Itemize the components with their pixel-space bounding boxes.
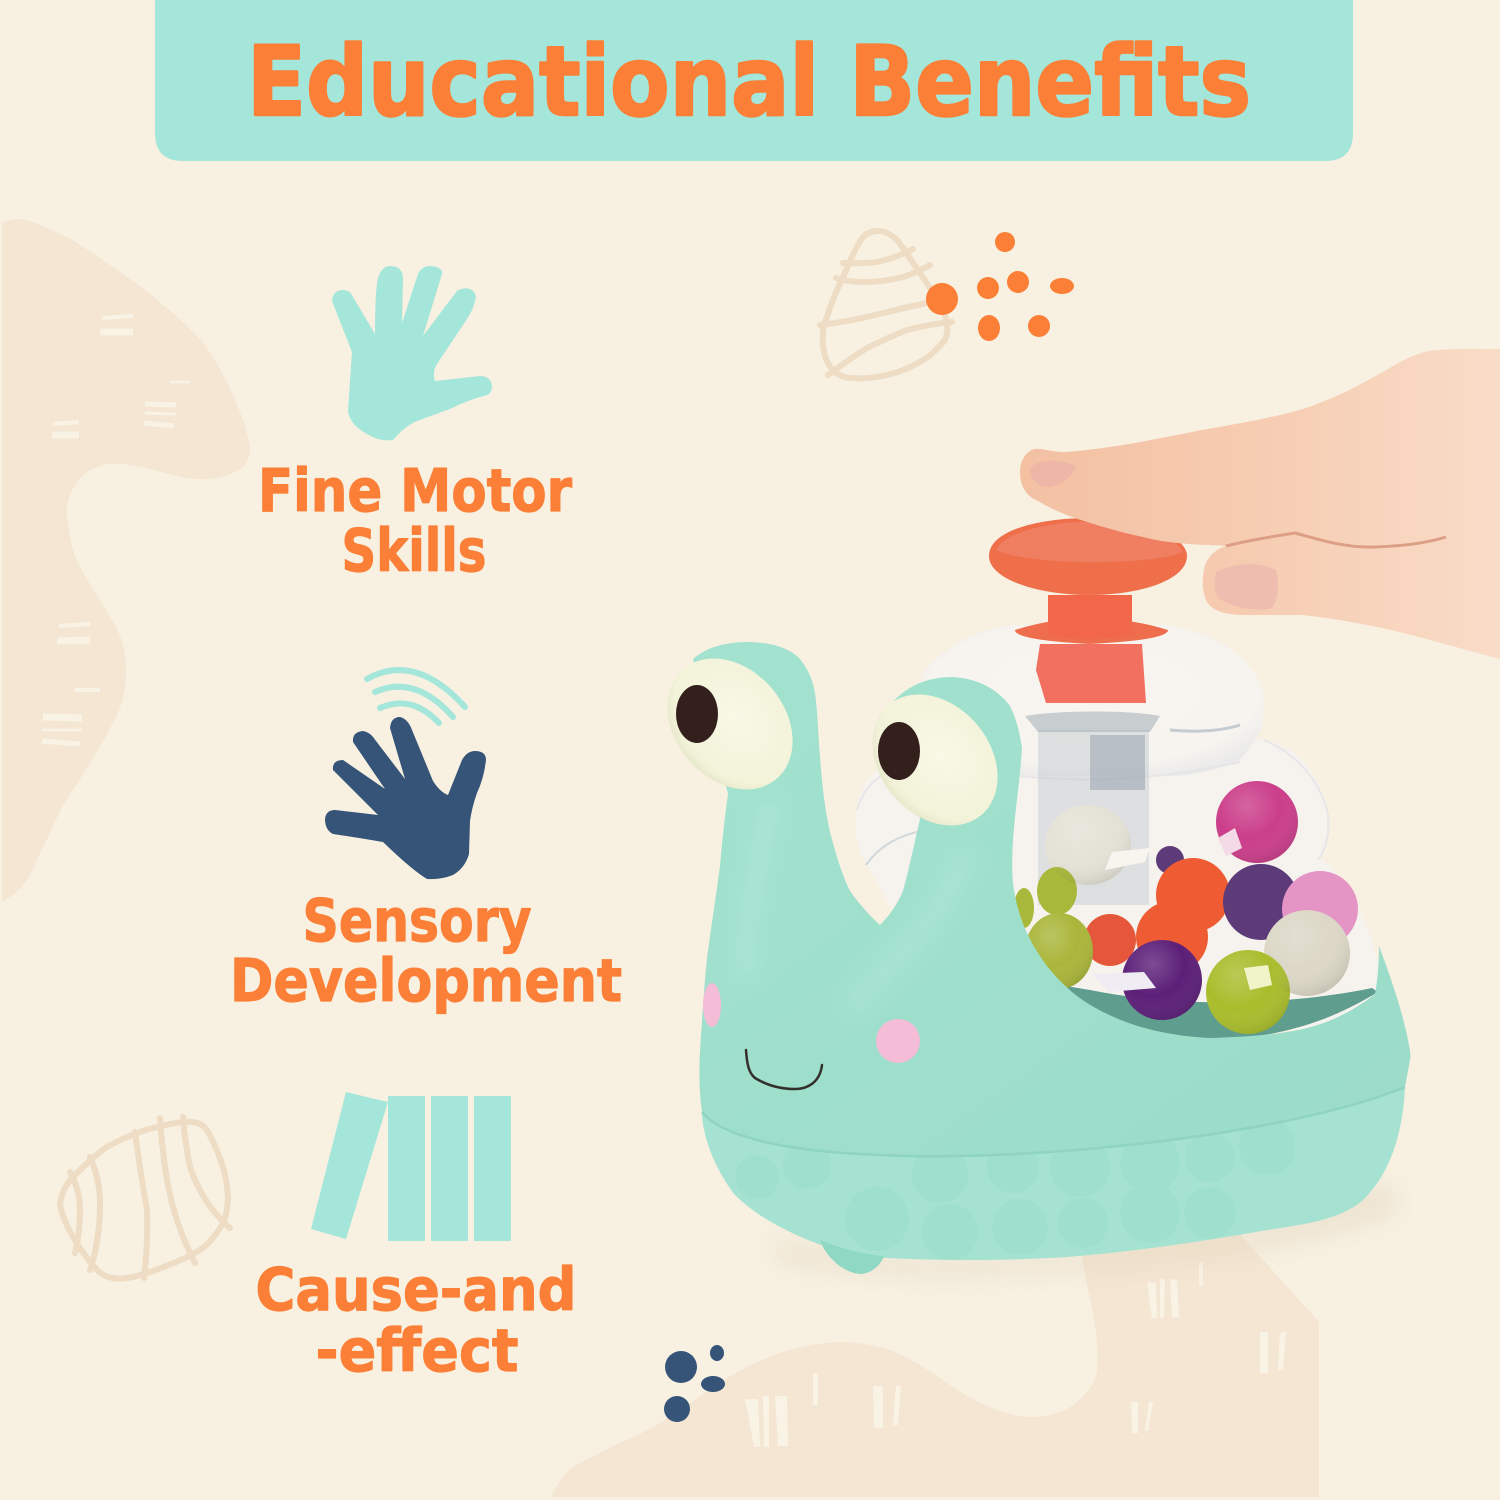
finger crease [1226, 533, 1446, 547]
title banner [155, 0, 1353, 161]
label: Fine Motor Skills: Fine Motor [258, 456, 572, 525]
thumbnail [1215, 564, 1278, 610]
icon: outlined shell bottom [60, 1117, 230, 1279]
title: Educational Benefits [247, 26, 1251, 138]
label: Sensory Development: Sensory [302, 886, 532, 955]
base pattern [735, 1119, 1295, 1260]
icon: hand [332, 266, 492, 440]
under-shell plunger tube [1036, 644, 1146, 703]
label: Sensory Development [230, 886, 622, 1015]
label: Fine Motor Skills [258, 456, 572, 585]
label: Cause-and-effect: -effect [316, 1316, 518, 1385]
index fingernail [1030, 461, 1076, 487]
label: Cause-and-effect [256, 1255, 576, 1385]
icon: waving hand [325, 670, 486, 879]
base [702, 1087, 1405, 1260]
icon: blue dots [664, 1345, 725, 1422]
icon: books [311, 1092, 511, 1241]
shell floor [1060, 985, 1378, 1040]
cheeks [703, 983, 920, 1063]
right eye [847, 669, 1023, 851]
photo: child's hand [1020, 349, 1500, 659]
central column [1038, 730, 1149, 905]
foot [820, 1240, 884, 1274]
product: snail toy [642, 518, 1410, 1275]
label: Cause-and-effect: Cause-and [256, 1255, 576, 1324]
left eye [642, 633, 818, 815]
decorative blob: bottom [551, 1201, 1319, 1497]
seam [702, 1087, 1405, 1156]
label: Sensory Development: Development [230, 946, 622, 1015]
icon: orange dots [926, 232, 1074, 341]
smile [746, 1050, 822, 1089]
decorative blob: left [2, 219, 250, 902]
plunger [989, 518, 1187, 644]
shell [856, 625, 1381, 1040]
snail body [693, 642, 1410, 1274]
beads [1014, 781, 1358, 1034]
body highlights [745, 800, 965, 1010]
label: Fine Motor Skills: Skills [342, 516, 486, 585]
toy shadow [760, 1180, 1400, 1275]
icon: outlined shell top [820, 231, 952, 378]
